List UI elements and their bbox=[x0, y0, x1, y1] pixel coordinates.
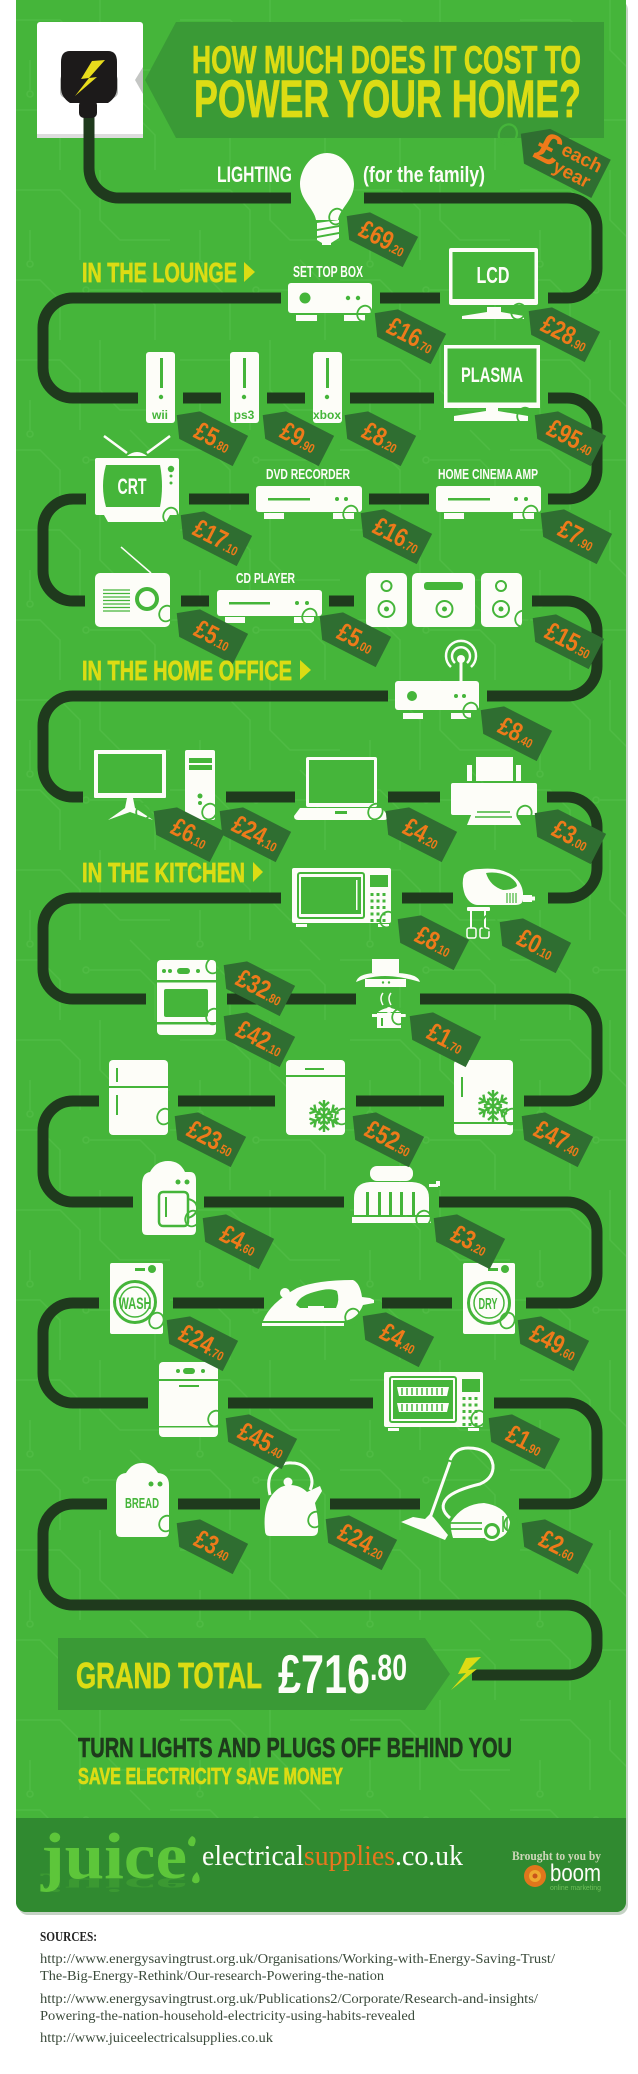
grand total label: GRAND TOTAL bbox=[76, 1655, 262, 1696]
price tag: vacuum: £2.60 bbox=[535, 1524, 582, 1567]
sources list: The-Big-Energy-Rethink/Our-research-Powering-the-nation bbox=[40, 1969, 384, 1984]
icon: CRT TV bbox=[95, 436, 179, 522]
price tag: xbox: £8.20 bbox=[358, 416, 405, 459]
icon: cooker hood and pot bbox=[356, 959, 420, 1028]
icon: home cinema amp bbox=[436, 486, 541, 519]
price tag: gas cooker: £42.10 bbox=[232, 1014, 289, 1062]
icon: washing machine: WASH bbox=[118, 1294, 152, 1313]
price tag: each year bbox=[491, 104, 613, 198]
price tag: DVD recorder bbox=[337, 493, 432, 564]
price tag: upright freezer bbox=[498, 1096, 593, 1167]
price tag: bread maker bbox=[153, 1503, 248, 1574]
price tag: PC tower: £24.10 bbox=[228, 809, 285, 857]
icon: desktop monitor bbox=[94, 750, 166, 820]
icon: tumble dryer bbox=[463, 1263, 515, 1334]
price tag: bread maker: £3.40 bbox=[190, 1524, 237, 1567]
price tag: set top box: £16.70 bbox=[383, 311, 440, 359]
price tag: home cinema amp: £7.90 bbox=[554, 514, 601, 557]
icon: bread maker bbox=[116, 1463, 169, 1537]
icon: coffee machine bbox=[142, 1161, 197, 1235]
price tag: mixer bbox=[476, 902, 571, 973]
price tag: each year: £ bbox=[527, 123, 571, 176]
price tag: grill microwave bbox=[465, 1398, 560, 1469]
icon: CD player bbox=[217, 590, 322, 623]
price tag: hood: £1.70 bbox=[423, 1017, 470, 1060]
price tag: hi-fi bbox=[509, 598, 604, 669]
price tag: vacuum bbox=[498, 1503, 593, 1574]
section: in the home office: IN THE HOME OFFICE bbox=[82, 655, 292, 686]
price tag: iron bbox=[339, 1296, 434, 1367]
icon: Xbox: xbox bbox=[313, 408, 341, 422]
icon: radio bbox=[95, 547, 170, 627]
logo: juice: juice bbox=[40, 1874, 187, 1895]
price tag: lighting: £69.20 bbox=[355, 214, 412, 262]
price tag: dishwasher bbox=[202, 1398, 297, 1469]
price tag: gas cooker bbox=[200, 996, 295, 1067]
price tag: washing machine: £24.70 bbox=[175, 1318, 232, 1366]
price tag: router: £8.40 bbox=[494, 711, 541, 754]
sources list: http://www.energysavingtrust.org.uk/Organisations/Working-with-Energy-Saving-Trust/ bbox=[40, 1952, 555, 1967]
icon: wireless router bbox=[395, 641, 479, 719]
price tag: hi-fi: £15.50 bbox=[541, 616, 598, 664]
label: DVD recorder: DVD RECORDER bbox=[266, 466, 350, 483]
price tag: microwave bbox=[374, 899, 469, 970]
price tag: laptop: £4.20 bbox=[399, 812, 446, 855]
icon: light bulb bbox=[300, 153, 354, 245]
icon: printer bbox=[451, 757, 537, 825]
price tag: radio bbox=[153, 593, 248, 664]
price tag: CRT bbox=[157, 495, 252, 566]
brought to you by: Brought to you by bbox=[512, 1849, 602, 1863]
icon: toaster bbox=[352, 1166, 440, 1223]
price tag: router bbox=[457, 690, 552, 761]
price tag: laptop bbox=[362, 791, 457, 862]
icon: PC tower bbox=[185, 750, 215, 820]
logo: boom: boom bbox=[550, 1860, 601, 1887]
price tag: mixer: £0.10 bbox=[513, 923, 560, 966]
price tag: plasma bbox=[511, 395, 606, 466]
icon: CRT TV: CRT bbox=[118, 474, 147, 499]
price tag: kettle bbox=[302, 1499, 397, 1570]
logo: boom bbox=[524, 1860, 601, 1892]
sources list bbox=[40, 1952, 555, 2046]
price tag: CD player bbox=[296, 596, 391, 667]
grand total ribbon bbox=[58, 1638, 450, 1710]
label: lighting: LIGHTING bbox=[217, 162, 292, 187]
icon: iron bbox=[262, 1280, 374, 1326]
price tag: CD player: £5.00 bbox=[333, 617, 380, 660]
price tag: CRT: £17.10 bbox=[189, 513, 246, 561]
icon: Xbox bbox=[313, 352, 342, 423]
price tag: fridge bbox=[151, 1096, 246, 1167]
icon: tumble dryer: DRY bbox=[478, 1296, 498, 1313]
price tag: each year: each bbox=[558, 140, 606, 178]
sub-slogan: SAVE ELECTRICITY SAVE MONEY bbox=[78, 1763, 343, 1789]
price tag: washing machine bbox=[143, 1300, 238, 1371]
sources heading: SOURCES: bbox=[40, 1930, 97, 1945]
icon: Wii bbox=[146, 352, 175, 423]
price tag: upright freezer: £47.40 bbox=[530, 1114, 587, 1162]
icon: cooker bbox=[157, 960, 216, 1035]
price tag: fridge: £23.50 bbox=[183, 1114, 240, 1162]
icon: grill microwave bbox=[384, 1372, 483, 1431]
price tag: monitor: £6.10 bbox=[167, 812, 214, 855]
price tag: coffee machine: £4.60 bbox=[216, 1219, 263, 1262]
sources list: Powering-the-nation-household-electricity-using-habits-revealed bbox=[40, 2009, 415, 2024]
price tag: grill microwave: £1.90 bbox=[502, 1419, 549, 1462]
icon: washing machine bbox=[110, 1263, 163, 1334]
grand total amount: £716 bbox=[278, 1643, 370, 1705]
price tag: DVD recorder: £16.70 bbox=[369, 511, 426, 559]
price tag: printer: £3.00 bbox=[548, 814, 595, 857]
price tag: wii bbox=[168, 403, 248, 466]
price tag: iron: £4.40 bbox=[376, 1317, 423, 1360]
price tag: toaster bbox=[410, 1198, 505, 1269]
icon: DVD recorder bbox=[256, 486, 362, 519]
price tag: LCD bbox=[505, 291, 600, 362]
price tag: electric cooker: £32.80 bbox=[232, 963, 289, 1011]
price tag: wii: £5.80 bbox=[190, 416, 237, 459]
icon: LCD TV: LCD bbox=[476, 262, 510, 288]
price tag: radio: £5.10 bbox=[190, 614, 237, 657]
price tag: ps3 bbox=[254, 403, 334, 466]
price tag: LCD: £28.90 bbox=[537, 309, 594, 357]
icon: LCD TV bbox=[449, 248, 538, 319]
price tag: lighting bbox=[323, 196, 418, 267]
icon: plug bbox=[61, 51, 117, 118]
price tag: dishwasher: £45.40 bbox=[234, 1416, 291, 1464]
icon: Wii: wii bbox=[151, 408, 168, 422]
price tag: plasma: £95.40 bbox=[543, 413, 600, 461]
price tag: hood bbox=[386, 996, 481, 1067]
icon: hi-fi speakers bbox=[366, 573, 522, 627]
price tag: dryer: £49.60 bbox=[526, 1318, 583, 1366]
logo: boom: online marketing bbox=[550, 1885, 601, 1892]
grand total amount: .80 bbox=[370, 1647, 407, 1688]
label: set top box: SET TOP BOX bbox=[293, 264, 363, 281]
logo: electricalsupplies.co.uk: electricalsupplies.co.uk bbox=[202, 1840, 463, 1872]
icon: chest freezer bbox=[286, 1060, 345, 1135]
icon: PS3 bbox=[230, 352, 259, 423]
section: in the lounge: IN THE LOUNGE bbox=[82, 257, 237, 288]
price tag: kettle: £24.20 bbox=[334, 1517, 391, 1565]
price tag: PC tower bbox=[196, 791, 291, 862]
logo: juice: juice bbox=[40, 1820, 187, 1893]
icon: dishwasher bbox=[159, 1362, 218, 1437]
label: CD player: CD PLAYER bbox=[236, 570, 295, 587]
price tag: home cinema amp bbox=[517, 493, 612, 564]
price tag: toaster: £3.20 bbox=[447, 1219, 494, 1262]
sources list: http://www.juiceelectricalsupplies.co.uk bbox=[40, 2031, 273, 2046]
icon: upright freezer bbox=[454, 1060, 513, 1135]
icon: laptop bbox=[294, 757, 388, 820]
price tag: set top box bbox=[351, 293, 446, 364]
footer band bbox=[16, 1818, 626, 1912]
icon: bread maker: BREAD bbox=[125, 1495, 159, 1512]
icon: plasma TV: PLASMA bbox=[461, 364, 523, 387]
title ribbon bbox=[145, 22, 604, 138]
price tag: monitor bbox=[130, 791, 225, 862]
price tag: chest freezer bbox=[329, 1096, 424, 1167]
sources list: http://www.energysavingtrust.org.uk/Publications2/Corporate/Research-and-insights/ bbox=[40, 1992, 538, 2007]
price tag: xbox bbox=[336, 403, 416, 466]
icon: PS3: ps3 bbox=[234, 408, 255, 422]
price tag: coffee machine bbox=[179, 1198, 274, 1269]
price tag: ps3: £9.90 bbox=[276, 416, 323, 459]
wall socket plate bbox=[37, 22, 143, 138]
icon: vacuum cleaner bbox=[401, 1448, 510, 1541]
icon: plasma TV bbox=[444, 345, 540, 421]
icon: lightning bolt bbox=[451, 1657, 481, 1690]
price tag: electric cooker bbox=[200, 945, 295, 1016]
label: for the family: (for the family) bbox=[363, 162, 485, 187]
icon: hand mixer bbox=[463, 869, 535, 938]
icon: set top box bbox=[288, 283, 372, 321]
price tag: printer bbox=[511, 793, 606, 864]
icon: microwave bbox=[292, 868, 391, 927]
cable bbox=[43, 112, 597, 1675]
title bbox=[192, 39, 581, 129]
icon: fridge bbox=[109, 1060, 168, 1135]
price tag: each year: year bbox=[549, 156, 594, 193]
icon: kettle bbox=[265, 1463, 322, 1536]
label: home cinema amp: HOME CINEMA AMP bbox=[438, 466, 538, 483]
section: in the kitchen: IN THE KITCHEN bbox=[82, 857, 245, 888]
price tag: microwave: £8.10 bbox=[411, 920, 458, 963]
price tag: dryer bbox=[494, 1300, 589, 1371]
price tag: chest freezer: £52.50 bbox=[361, 1114, 418, 1162]
